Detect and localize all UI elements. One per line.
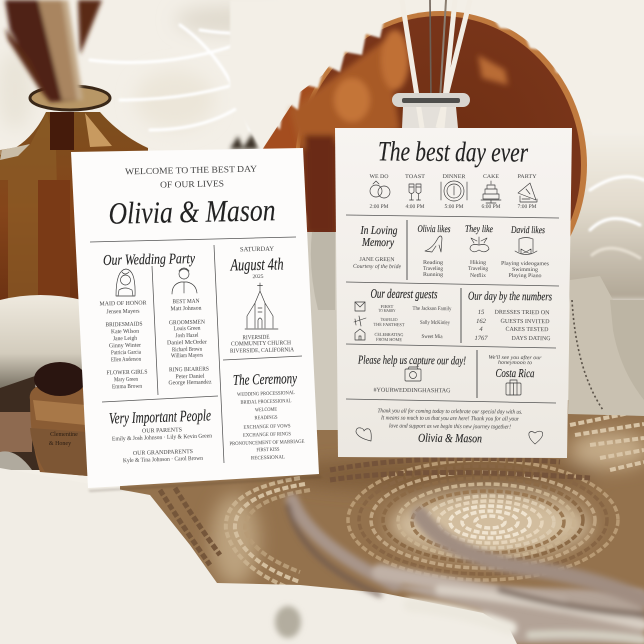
- timeline labels: CAKE: [483, 174, 500, 180]
- heading: our wedding party: Our Wedding Party: [103, 251, 195, 269]
- icon: camera: [405, 367, 421, 381]
- icon: gramophone: [518, 183, 537, 202]
- timeline labels: PARTY: [517, 174, 537, 180]
- white fur rug: [0, 6, 644, 300]
- icon: masquerade mask: [470, 237, 489, 252]
- ceremony list: PRONOUNCEMENT OF MARRIAGE: [229, 439, 305, 447]
- candle jar: [30, 362, 88, 476]
- likes lists: Swimming: [512, 267, 538, 273]
- thank you note: It means so much to us that you are here! Thank you for all your: [380, 414, 520, 423]
- wedding party: bride side: FLOWER GIRLS: [106, 370, 148, 376]
- our day by the numbers: DRESSES TRIED ON: [494, 310, 550, 316]
- our day by the numbers: 162: [476, 318, 487, 325]
- our day by the numbers: 15: [478, 309, 485, 316]
- wedding party: groom side: [167, 299, 212, 386]
- shadow under the left card: [88, 476, 322, 492]
- our day by the numbers: [468, 289, 552, 342]
- icon: envelope: [355, 302, 365, 311]
- wedding party: groom side: Richard Brown: [172, 347, 202, 353]
- our dearest guests heading: Our dearest guests: [370, 286, 438, 301]
- venue: [230, 335, 295, 355]
- wedding party: bride side: Jane Leigh: [113, 336, 137, 342]
- ceremony list: EXCHANGE OF VOWS: [243, 423, 291, 431]
- candle jar: Clementine: [50, 432, 78, 438]
- our day by the numbers: CAKES TESTED: [505, 327, 549, 333]
- thank you note: love and support as we begin this new journey together!: [389, 423, 511, 431]
- likes headings: David likes: [510, 225, 545, 236]
- our day by the numbers: Our day by the numbers: [468, 289, 552, 303]
- venue: COMMUNITY CHURCH: [231, 340, 292, 348]
- icon: dinner plate: [441, 181, 467, 201]
- hashtag: #YOURWEDDINGHASHTAG: [373, 388, 451, 394]
- honeymoon note: Costa Rica: [495, 366, 535, 380]
- wedding party: bride side: BRIDESMAIDS: [105, 322, 143, 328]
- likes lists: Running: [423, 272, 443, 278]
- left card: wedding program: [71, 148, 319, 488]
- timeline labels: 7:00 PM: [517, 204, 537, 210]
- likes lists: Traveling: [468, 266, 488, 272]
- very important people: [109, 407, 212, 464]
- right card: the best day ever: [335, 128, 572, 458]
- welcome heading: OF OUR LIVES: [160, 178, 224, 190]
- welcome heading: [125, 164, 258, 190]
- timeline labels: TOAST: [405, 174, 426, 180]
- icon: high heel: [425, 236, 442, 252]
- wedding party: groom side: GROOMSMEN: [169, 320, 206, 326]
- guest awards: Sally McKinley: [420, 320, 450, 326]
- wedding party: bride side: MAID OF HONOR: [99, 301, 147, 307]
- guest awards: THE FARTHEST: [373, 322, 405, 327]
- wedding party: bride side: Patricia Garcia: [111, 350, 141, 356]
- venue: RIVERSIDE, CALIFORNIA: [230, 347, 295, 355]
- wedding party: bride side: Ellen Anderson: [111, 357, 141, 363]
- pampas backing at lower right: [383, 585, 644, 644]
- guest awards: Sweet Mia: [421, 334, 443, 340]
- white fabric: [0, 468, 517, 644]
- honeymoon note: We'll see you after our: [488, 354, 542, 361]
- date block: SATURDAY: [240, 246, 274, 253]
- candle jar: & Honey: [49, 441, 71, 447]
- wedding party: bride side: [99, 301, 148, 390]
- guest awards: TO MARRY: [378, 308, 396, 313]
- icon: groom: [172, 268, 197, 294]
- wedding party: groom side: Peter Daniel: [175, 374, 205, 380]
- date block: August 4th: [230, 254, 284, 275]
- thank you note: Thank you all for coming today to celebrate our special day with us.: [377, 407, 523, 416]
- ceremony list: RECESSIONAL: [251, 454, 285, 462]
- likes headings: They like: [465, 224, 493, 235]
- our day by the numbers: 1767: [474, 335, 488, 342]
- likes headings: [417, 224, 545, 236]
- our day by the numbers: DAYS DATING: [511, 336, 551, 342]
- in loving memory: [353, 223, 401, 270]
- wedding party: bride side: Emma Brown: [112, 384, 142, 390]
- timeline labels: 5:00 PM: [444, 204, 464, 210]
- welcome heading: WELCOME TO THE BEST DAY: [125, 164, 258, 176]
- guest awards: FIRST: [380, 304, 394, 309]
- ceremony list: [229, 390, 305, 462]
- guest awards: CELEBRATING: [374, 332, 404, 337]
- guest awards: [373, 304, 452, 342]
- timeline labels: 2:00 PM: [369, 204, 389, 210]
- very important people: Kyle & Tina Johnson · Carol Brown: [123, 456, 203, 464]
- very important people: OUR PARENTS: [142, 427, 182, 435]
- fur over the tray: [230, 0, 644, 150]
- ceremony list: WELCOME: [255, 407, 277, 413]
- wedding party: groom side: Josh Hazel: [175, 333, 199, 339]
- icon: airplane: [354, 316, 366, 326]
- vase and pampas: [0, 0, 148, 310]
- thank you note: [377, 407, 523, 431]
- icon: bride: [116, 269, 135, 296]
- icon: cake: [481, 181, 501, 203]
- ceremony list: BRIDAL PROCESSIONAL: [240, 398, 292, 406]
- left card paper: [71, 148, 319, 488]
- in loving memory: In Loving: [360, 223, 398, 237]
- dividers: [346, 215, 559, 403]
- couple signature: Olivia & Mason: [418, 431, 482, 445]
- icon: church: [245, 283, 278, 329]
- very important people: OUR GRANDPARENTS: [133, 449, 193, 457]
- our day by the numbers: 4: [479, 326, 483, 333]
- timeline labels: WE DO: [369, 174, 389, 180]
- wedding party: groom side: William Mayers: [171, 353, 204, 359]
- very important people: Very Important People: [109, 407, 211, 428]
- wedding party: groom side: Louis Green: [173, 326, 201, 332]
- glass jar with reeds: [392, 0, 470, 128]
- in loving memory: Memory: [361, 235, 395, 249]
- timeline labels: [369, 174, 537, 210]
- wedding party: groom side: George Hernandez: [168, 380, 212, 386]
- wedding party: bride side: Mary Green: [114, 377, 138, 383]
- ceremony heading: The Ceremony: [233, 371, 297, 389]
- likes lists: Traveling: [423, 266, 443, 272]
- icon: top hat with bow: [515, 238, 537, 254]
- likes lists: Netflix: [470, 272, 486, 279]
- couple names: Olivia & Mason: [108, 192, 276, 231]
- ceremony list: WEDDING PROCESSIONAL: [237, 390, 295, 398]
- likes headings: Olivia likes: [417, 224, 451, 235]
- pampas plumes: [288, 500, 644, 640]
- wedding party: bride side: Ginny Winter: [109, 343, 141, 349]
- date block: [230, 246, 284, 280]
- date block: 2025: [252, 274, 264, 280]
- wedding party: bride side: Kate Wilson: [111, 329, 139, 335]
- icon: left heart: [356, 428, 371, 441]
- wood tray: [262, 11, 587, 319]
- guest awards: TRAVELED: [380, 317, 398, 322]
- linen behind the cards: [300, 232, 340, 430]
- ceremony list: FIRST KISS: [256, 447, 280, 453]
- wedding party: groom side: BEST MAN: [172, 299, 200, 305]
- right linen: [568, 276, 644, 416]
- right card paper: [335, 128, 572, 458]
- timeline labels: 4:00 PM: [405, 204, 425, 210]
- wedding party: groom side: Daniel McOrder: [167, 340, 207, 346]
- wedding party: groom side: Matt Johnson: [170, 306, 202, 312]
- dividers: [90, 237, 302, 463]
- ceremony list: READINGS: [254, 415, 278, 421]
- icon: house: [355, 329, 365, 340]
- icon: champagne glasses: [409, 184, 421, 200]
- timeline labels: 6:00 PM: [481, 204, 501, 210]
- likes lists: [423, 260, 549, 279]
- timeline labels: DINNER: [442, 174, 466, 180]
- icon: suitcase: [506, 380, 521, 395]
- our day by the numbers: GUESTS INVITED: [500, 319, 550, 325]
- in loving memory: JANE GREEN: [359, 257, 395, 263]
- likes lists: Reading: [423, 260, 443, 266]
- left fur: [0, 295, 82, 392]
- photo prompt: Please help us capture our day!: [357, 353, 466, 367]
- guest awards: FROM HOME: [376, 337, 402, 342]
- ceremony list: EXCHANGE OF RINGS: [243, 431, 291, 439]
- honeymoon note: honeymoon to: [498, 360, 532, 366]
- likes lists: Hiking: [470, 260, 486, 266]
- very important people: Emily & Josh Johnson · Lily & Kevin Green: [112, 433, 212, 443]
- guest awards: The Jackson Family: [412, 306, 452, 312]
- icon: right heart: [529, 431, 543, 444]
- venue: RIVERSIDE: [242, 335, 270, 341]
- wedding party: groom side: RING BEARERS: [169, 367, 209, 373]
- in loving memory: Courtesy of the bride: [353, 263, 401, 270]
- title: The best day ever: [378, 136, 528, 169]
- wedding party: bride side: Jensen Mayers: [106, 309, 140, 315]
- honeymoon note: [488, 354, 542, 380]
- likes lists: Playing Piano: [508, 273, 542, 279]
- jute mat: [120, 400, 644, 644]
- icon: rings: [370, 181, 390, 198]
- likes lists: Playing videogames: [501, 261, 549, 267]
